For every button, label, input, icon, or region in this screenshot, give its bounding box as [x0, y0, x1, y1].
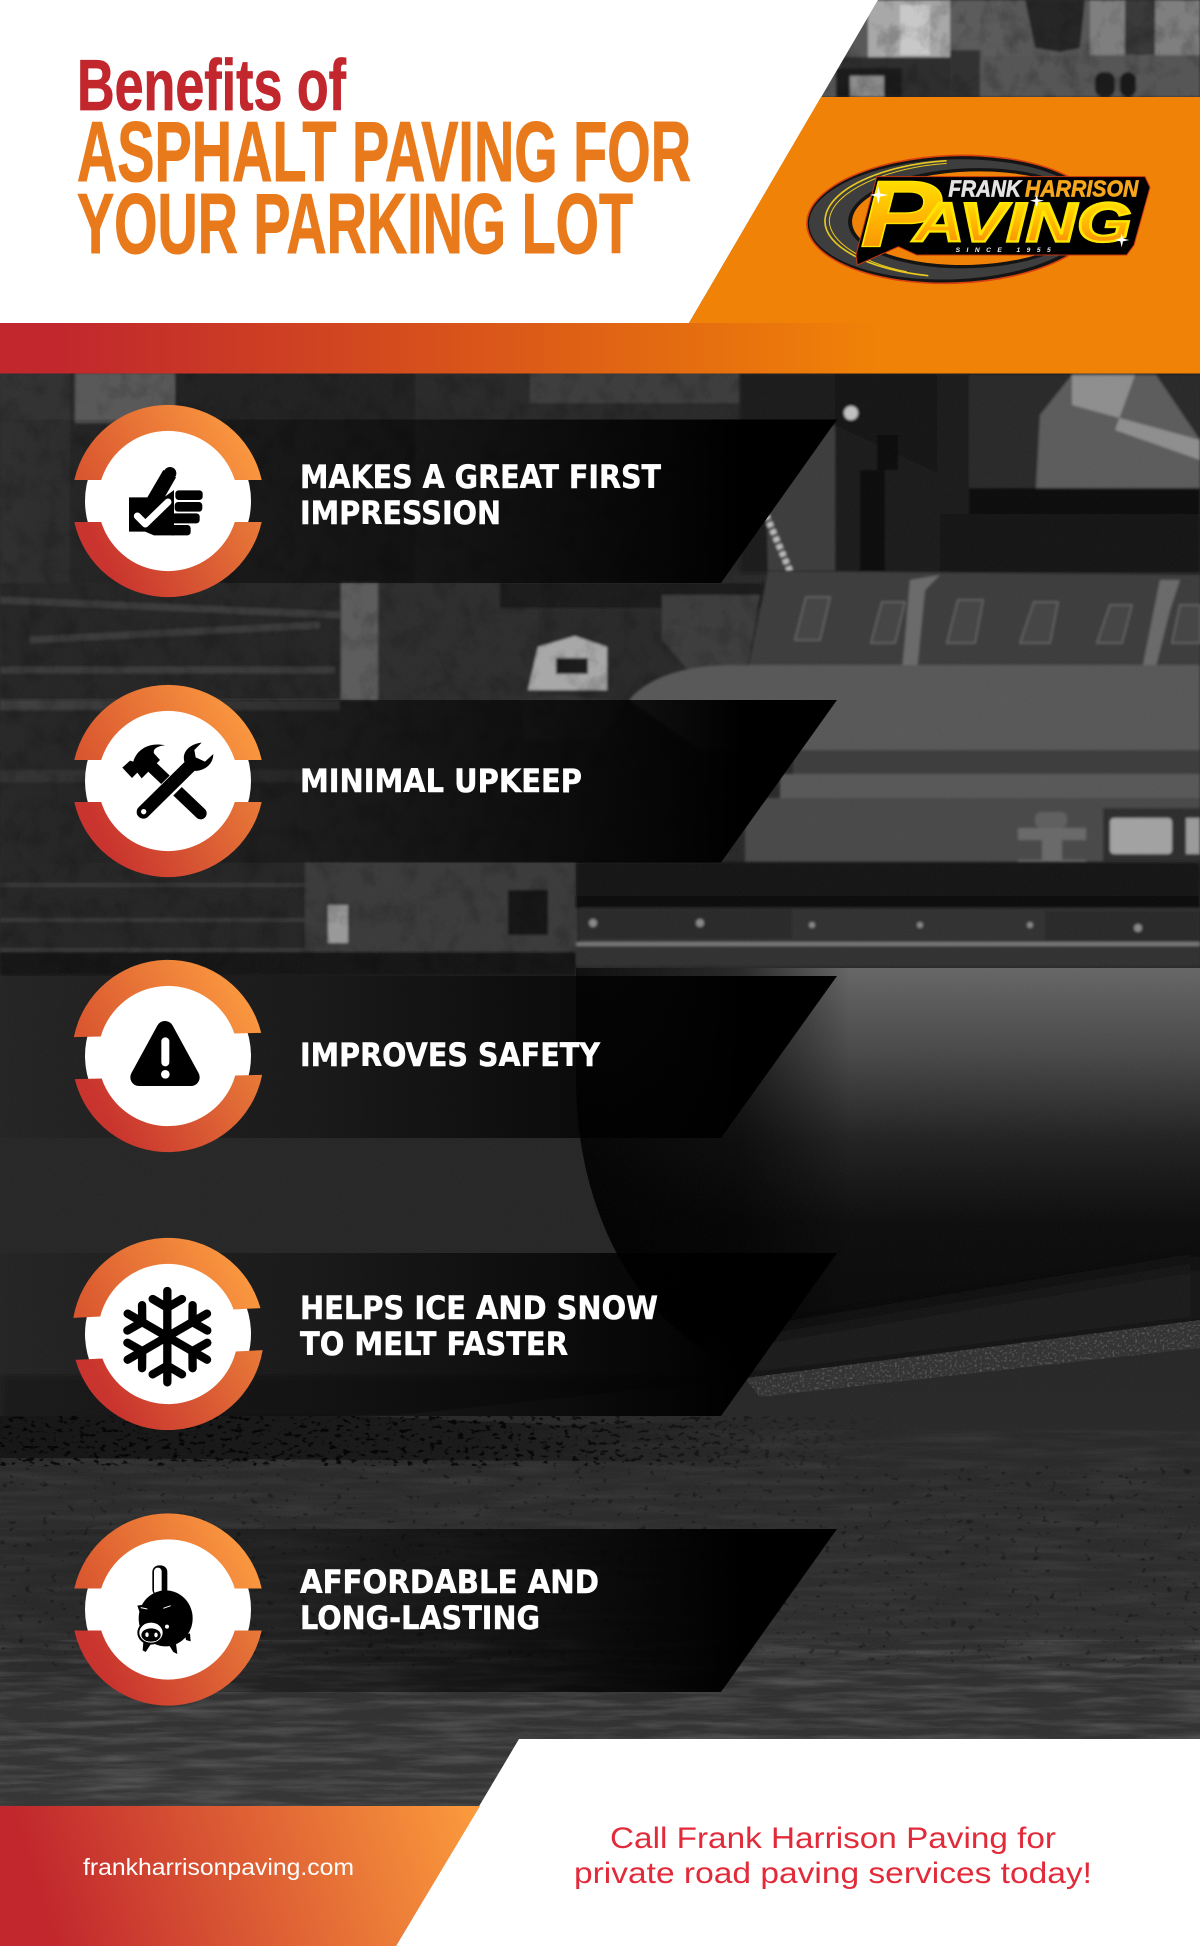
title: Benefits of: [77, 46, 347, 126]
label 4: TO MELT FASTER: [300, 1325, 568, 1363]
logo: company name: FRANK: [948, 176, 1023, 202]
logo: company name: HARRISON: [1025, 176, 1139, 202]
photo: roller rail: [576, 862, 1200, 966]
photo: upper machinery on the left: [0, 373, 770, 976]
footer white panel: [396, 1739, 1200, 1946]
logo: road ring: [804, 150, 1103, 289]
header orange panel: [689, 97, 1200, 323]
label 1: IMPRESSION: [300, 494, 501, 532]
icon: piggy bank: [137, 1565, 193, 1654]
header gradient band: [0, 323, 1200, 374]
footer gradient panel: [0, 1806, 480, 1946]
label 3: IMPROVES SAFETY: [300, 1036, 601, 1074]
ribbon 5: [0, 1529, 837, 1692]
photo: cab of the roller: [740, 373, 1200, 573]
photo: machinery mottling: [0, 373, 760, 973]
label 1: MAKES A GREAT FIRST: [300, 458, 661, 496]
photo: fresh asphalt ridge: [0, 1318, 1200, 1666]
label 2: MINIMAL UPKEEP: [300, 762, 582, 800]
badge 3: [72, 958, 264, 1154]
header white panel: [0, 0, 878, 323]
label 1: [300, 458, 661, 532]
call to action: private road paving services today!: [574, 1857, 1092, 1890]
label 5: AFFORDABLE AND: [300, 1563, 599, 1601]
ribbon 2: [0, 700, 837, 862]
photo: ground under the machine: [0, 976, 780, 1421]
photo: steel drum: [576, 968, 1200, 1388]
photo: asphalt surface: [0, 1320, 1200, 1946]
icon: warning triangle: [139, 1030, 191, 1079]
badge 5: [74, 1513, 262, 1706]
badge 2: [74, 685, 262, 877]
icon: snowflake: [127, 1291, 207, 1382]
label 5: LONG-LASTING: [300, 1599, 540, 1637]
logo: black plate: [856, 177, 1150, 265]
ribbon 4: [0, 1253, 837, 1416]
website address: frankharrisonpaving.com: [83, 1854, 354, 1880]
badge 4: [69, 1233, 267, 1435]
benefit 3: [0, 958, 837, 1154]
label 5: [300, 1563, 599, 1637]
title: YOUR PARKING LOT: [77, 177, 633, 272]
title: [77, 46, 691, 272]
logo: sparkles: [870, 187, 1129, 247]
logo: company name: SINCE 1955: [956, 247, 1052, 254]
logo: company name: P: [860, 162, 942, 268]
benefit 5: [0, 1513, 837, 1706]
call to action: [574, 1822, 1092, 1890]
badge 1: [74, 405, 262, 597]
call to action: Call Frank Harrison Paving for: [610, 1822, 1056, 1855]
logo: company name: AVING: [911, 191, 1132, 254]
ribbon 3: [0, 976, 837, 1138]
background photo: asphalt roller: [0, 374, 1200, 1806]
benefit 4: [0, 1233, 837, 1435]
label 4: [300, 1289, 658, 1363]
ribbon 1: [0, 420, 837, 583]
benefit 2: [0, 685, 837, 877]
icon: hammer and wrench: [122, 743, 213, 814]
title: ASPHALT PAVING FOR: [77, 105, 691, 200]
photo: roller hood and body: [629, 571, 1200, 876]
logo: Frank Harrison Paving: [804, 150, 1150, 289]
benefit 1: [0, 405, 837, 597]
label 4: HELPS ICE AND SNOW: [300, 1289, 658, 1327]
icon: thumbs up with check: [129, 470, 203, 535]
photo: top right corner: [800, 0, 1200, 97]
logo: company name: [860, 162, 1139, 268]
